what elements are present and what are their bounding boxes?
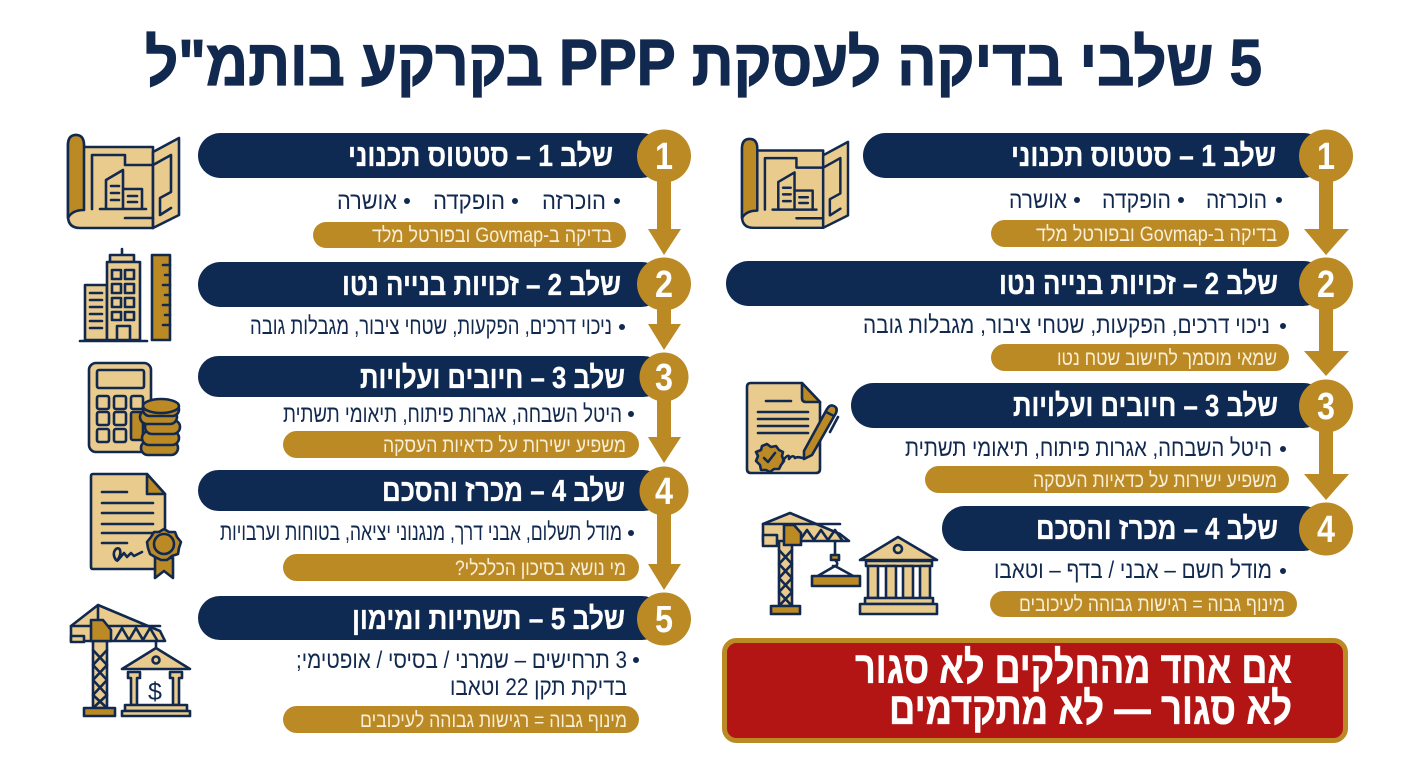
note pill: בדיקה ב-Govmap ובפורטל מלד (372, 224, 612, 247)
header bar (942, 506, 1326, 551)
note pill: מינוף גבוה = רגישות גבוהה לעיכובים (360, 709, 627, 732)
icon: blueprint (68, 135, 179, 228)
heading: שלב 4 – מכרז והסכם (1036, 511, 1278, 546)
icon: contract with pen (747, 383, 838, 473)
bullets: אושרה (337, 188, 397, 215)
number badge (637, 592, 691, 646)
arrow: step 4 to 5 (648, 511, 681, 590)
heading: שלב 2 – זכויות בנייה נטו (999, 266, 1278, 301)
note pill: משפיע ישירות על כדאיות העסקה (1033, 469, 1277, 492)
step 3 right (851, 380, 1353, 493)
arrow: step 3 to 4 (1304, 428, 1349, 500)
panel: right column (724, 130, 1353, 740)
bullet: ניכוי דרכים, הפקעות, שטחי ציבור, מגבלות גובה (250, 313, 612, 340)
icon: contract with seal (91, 474, 181, 578)
panel: left column (68, 130, 691, 733)
step 2 left (198, 258, 691, 340)
callout: לא סגור — לא מתקדמים (889, 683, 1292, 734)
callout: אם אחד מהחלקים לא סגור (855, 642, 1292, 693)
bullets (1009, 187, 1282, 214)
note pill: משפיע ישירות על כדאיות העסקה (383, 434, 626, 457)
bullet: היטל השבחה, אגרות פיתוח, תיאומי תשתית (905, 435, 1272, 462)
number: 3 (1317, 386, 1335, 428)
note pill: בדיקה ב-Govmap ובפורטל מלד (1036, 223, 1277, 246)
callout (724, 640, 1346, 740)
step 3 left (198, 352, 688, 458)
step 5 left (198, 592, 691, 733)
bullets (337, 188, 620, 215)
number: 1 (655, 136, 673, 178)
icon: building and ruler (80, 249, 170, 341)
bullets: הופקדה (433, 188, 505, 215)
heading: שלב 1 – סטטוס תכנוני (1011, 138, 1276, 173)
icon: blueprint (742, 139, 848, 228)
note pill (283, 706, 639, 733)
arrow: step 1 to 2 (648, 178, 681, 255)
number badge (637, 258, 691, 310)
number: 4 (655, 471, 673, 513)
header bar (863, 133, 1326, 178)
icon: dollar sign: $ (148, 678, 162, 706)
header bar (198, 133, 664, 178)
header bar (198, 470, 664, 511)
arrow: step 3 to 4 (648, 397, 681, 463)
number badge (1299, 130, 1353, 182)
step 2 right (726, 258, 1353, 371)
number badge (1299, 380, 1353, 432)
step 1 right (863, 130, 1353, 247)
number badge (640, 466, 688, 516)
bullet: מודל חשם – אבני / בדף – וטאבו (994, 557, 1272, 584)
note pill (925, 466, 1289, 493)
number: 5 (655, 599, 673, 641)
bullet: ניכוי דרכים, הפקעות, שטחי ציבור, מגבלות גובה (863, 312, 1270, 339)
number: 1 (1317, 136, 1335, 178)
header bar (726, 261, 1326, 306)
arrow: step 2 to 3 (648, 307, 681, 350)
number: 2 (1317, 264, 1335, 306)
arrow: step 1 to 2 (1304, 178, 1349, 255)
bullet: בדיקת תקן 22 וטאבו (450, 674, 627, 701)
arrow: step 2 to 3 (1304, 306, 1349, 376)
header bar (198, 262, 664, 307)
header bar (198, 356, 664, 397)
number: 4 (1317, 509, 1335, 551)
bullet: מודל תשלום, אבני דרך, מנגנוני יציאה, בטוחות וערבויות (220, 519, 622, 546)
heading: שלב 1 – סטטוס תכנוני (348, 138, 613, 173)
title: 5 שלבי בדיקה לעסקת PPP בקרקע בותמ"ל (145, 26, 1262, 99)
bullets: אושרה (1009, 187, 1067, 214)
note pill: שמאי מוסמך לחישוב שטח נטו (1057, 347, 1277, 370)
note pill: מי נושא בסיכון הכלכלי? (455, 557, 626, 580)
heading: שלב 2 – זכויות בנייה נטו (342, 267, 621, 302)
bullets: הופקדה (1102, 187, 1171, 214)
number badge (640, 352, 688, 402)
icon: calculator and coins (89, 363, 180, 455)
step 1 left (198, 130, 691, 248)
number: 2 (655, 264, 673, 306)
note pill (991, 344, 1289, 371)
heading: שלב 5 – תשתיות ומימון (352, 601, 625, 636)
note pill (283, 554, 639, 581)
header bar (198, 596, 664, 640)
bullet: היטל השבחה, אגרות פיתוח, תיאומי תשתית (283, 401, 622, 428)
bullet (296, 647, 639, 701)
number: 3 (655, 357, 673, 399)
number badge (1299, 502, 1353, 556)
bullets: הוכרזה (542, 188, 606, 215)
note pill (283, 431, 639, 458)
number badge (637, 130, 691, 182)
header bar (851, 383, 1326, 428)
icon: crane and bank (763, 513, 937, 614)
note pill: מינוף גבוה = רגישות גבוהה לעיכובים (1019, 593, 1285, 616)
number badge (1299, 258, 1353, 310)
heading: שלב 3 – חיובים ועלויות (360, 360, 625, 395)
heading: שלב 4 – מכרז והסכם (382, 473, 625, 508)
bullet: 3 תרחישים – שמרני / בסיסי / אופטימי; (296, 647, 627, 674)
icon: crane and bank (71, 605, 190, 716)
heading: שלב 3 – חיובים ועלויות (1013, 388, 1278, 423)
step 4 left (198, 466, 688, 581)
bullets: הוכרזה (1206, 187, 1267, 214)
step 4 right (942, 502, 1353, 617)
